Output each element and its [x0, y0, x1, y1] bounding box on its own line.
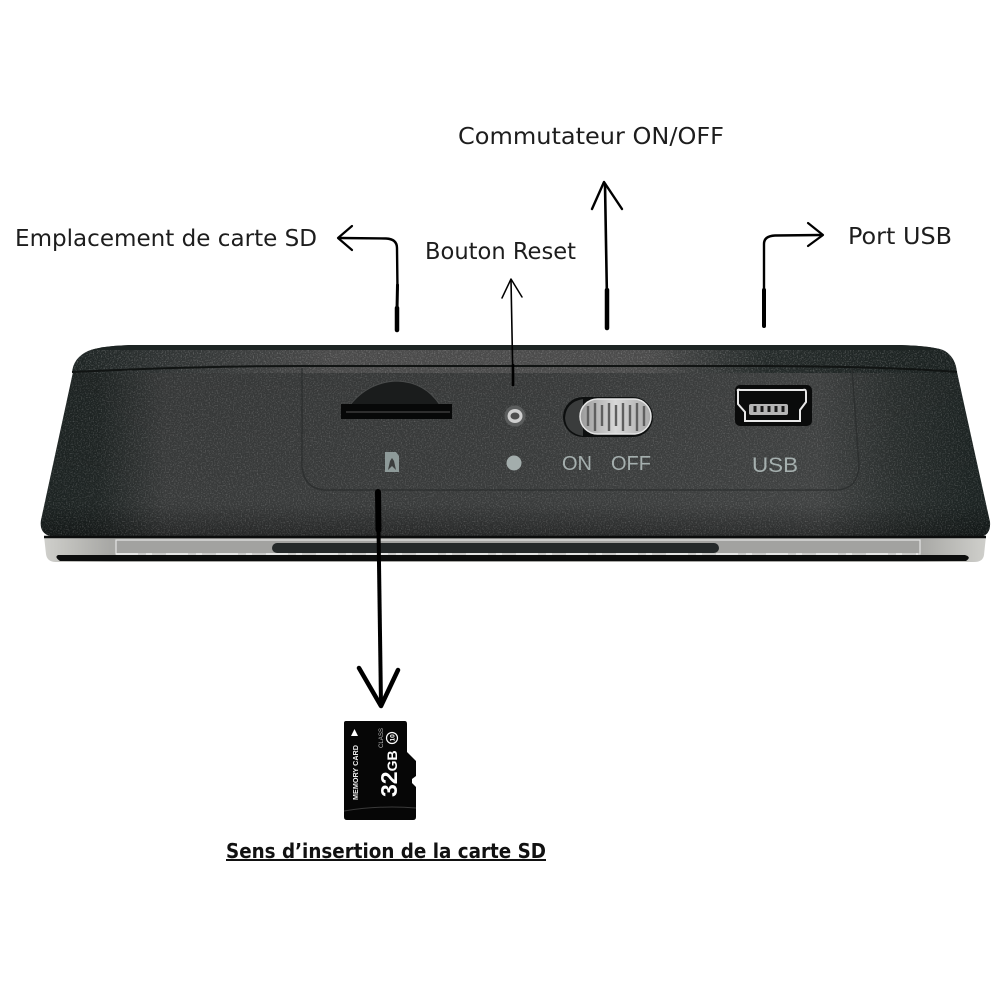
card triangle — [351, 729, 358, 736]
card text: CLASS: CLASS — [379, 728, 385, 748]
reset button — [504, 406, 526, 470]
recessed port panel — [302, 368, 859, 490]
arrow: reset button to label — [502, 279, 522, 385]
label: Bouton Reset: Bouton Reset — [425, 239, 576, 265]
card text: 32GB: 32GB — [376, 750, 402, 797]
SD card slot — [341, 381, 452, 419]
ON label: ON — [562, 453, 592, 475]
caption: Sens d’insertion de la carte SD — [226, 839, 546, 863]
USB port — [735, 385, 812, 426]
arrow: switch to label — [592, 182, 622, 328]
arrow: down to micro SD card — [359, 492, 398, 706]
device body — [41, 372, 990, 537]
infographic canvas — [17, 126, 990, 861]
metal base strip — [44, 536, 986, 562]
device lid — [70, 344, 960, 374]
arrow: USB to label — [764, 223, 823, 326]
device photo — [41, 344, 990, 562]
arrow: SD slot to label — [338, 226, 398, 330]
SD icon — [385, 452, 399, 472]
label: Emplacement de carte SD: Emplacement de carte SD — [15, 226, 317, 252]
OFF label: OFF — [611, 453, 651, 475]
label: Commutateur ON/OFF: Commutateur ON/OFF — [458, 124, 724, 150]
micro SD card — [344, 721, 416, 820]
card class 10 badge: 10 — [390, 734, 396, 742]
card text: MEMORY CARD: MEMORY CARD — [351, 744, 360, 800]
label: Port USB: Port USB — [848, 224, 952, 250]
USB label: USB — [752, 454, 798, 477]
ON/OFF switch — [563, 397, 653, 437]
